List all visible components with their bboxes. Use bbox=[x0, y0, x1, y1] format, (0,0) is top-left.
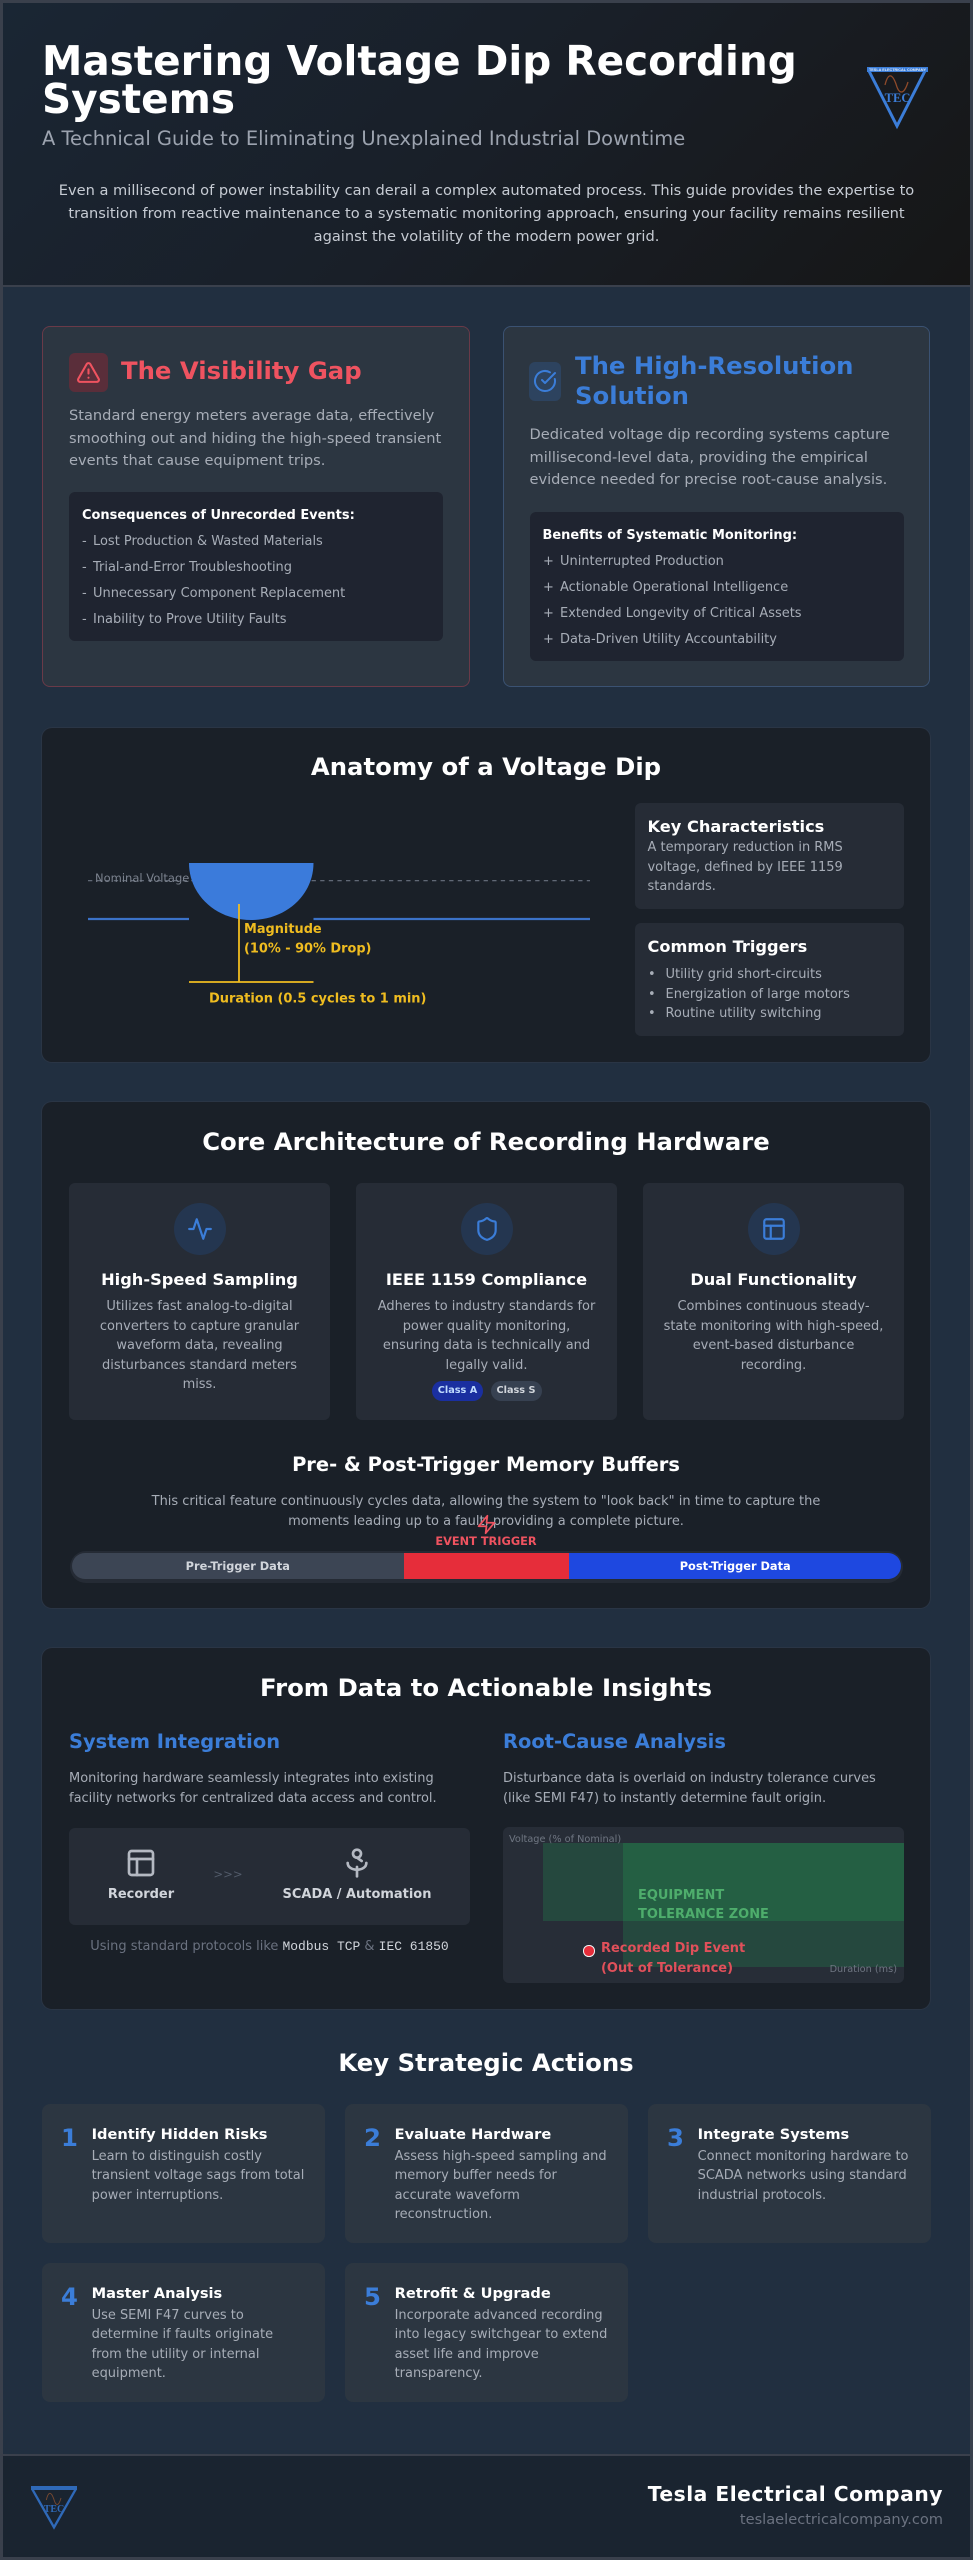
logo: TEC: TESLA ELECTRICAL COMPANY bbox=[869, 68, 926, 72]
description: transient voltage sags from total bbox=[92, 2168, 304, 2183]
heading: The High-Resolution bbox=[575, 351, 854, 380]
number: 4 bbox=[61, 2282, 78, 2311]
chart: voltage dip diagram: Magnitude bbox=[244, 922, 322, 937]
card: common triggers: Utility grid short-circuits bbox=[666, 967, 822, 982]
description: Utilizes fast analog-to-digital bbox=[106, 1299, 293, 1314]
description: Monitoring hardware seamlessly integrates into existing bbox=[69, 1771, 434, 1786]
heading: System Integration bbox=[69, 1730, 280, 1753]
description: waveform data, revealing bbox=[116, 1338, 283, 1353]
panel: data to insights bbox=[42, 1648, 930, 2009]
heading: Evaluate Hardware bbox=[395, 2126, 551, 2142]
card: IEEE 1159 compliance bbox=[356, 1183, 617, 1420]
heading: Master Analysis bbox=[92, 2284, 222, 2302]
zone label: TOLERANCE ZONE bbox=[638, 1907, 769, 1922]
list items: + bbox=[543, 632, 554, 646]
heading: Common Triggers bbox=[648, 937, 807, 956]
bullet list bbox=[648, 967, 850, 1021]
description: from the utility or internal bbox=[92, 2346, 259, 2362]
logo: TEC bbox=[867, 67, 928, 130]
icon: recorder bbox=[128, 1850, 154, 1876]
description: (like SEMI F47) to instantly determine fault origin. bbox=[503, 1790, 826, 1806]
axis label: voltage: Voltage (% of Nominal) bbox=[509, 1834, 621, 1845]
chart: voltage dip diagram: (10% - 90% Drop) bbox=[244, 942, 371, 956]
list items: + bbox=[543, 554, 554, 568]
list heading: Benefits of Systematic Monitoring: bbox=[542, 528, 797, 542]
description bbox=[100, 1299, 300, 1392]
card: common triggers: Energization of large motors bbox=[666, 986, 850, 1002]
description bbox=[503, 1771, 876, 1806]
benefits list: Uninterrupted Production bbox=[560, 554, 724, 568]
icon: warning triangle bbox=[69, 353, 108, 392]
description bbox=[378, 1299, 596, 1372]
segment: pre-trigger bbox=[72, 1553, 404, 1579]
segment: post-trigger bbox=[569, 1553, 901, 1579]
consequences list: Inability to Prove Utility Faults bbox=[93, 612, 287, 626]
action 2 bbox=[345, 2104, 628, 2243]
benefits list: Actionable Operational Intelligence bbox=[560, 580, 788, 594]
description: state monitoring with high-speed, bbox=[664, 1318, 883, 1334]
description: industrial protocols. bbox=[698, 2188, 826, 2202]
description: recording. bbox=[741, 1358, 806, 1372]
badge: class A: Class A bbox=[438, 1385, 477, 1396]
description: memory buffers: This critical feature continuously cycles data, allowing the system to "look back" in time to capture the bbox=[152, 1494, 820, 1509]
arrow chevrons: >>> bbox=[213, 1867, 243, 1881]
description: miss. bbox=[183, 1377, 216, 1392]
description: asset life and improve bbox=[395, 2346, 539, 2362]
chart: voltage dip diagram bbox=[88, 863, 590, 1006]
action 5 bbox=[345, 2263, 628, 2402]
column: system integration bbox=[69, 1730, 470, 1954]
description bbox=[394, 2148, 607, 2222]
card: key characteristics bbox=[635, 803, 904, 909]
marker: dip event bbox=[583, 1945, 594, 1956]
description: transparency. bbox=[395, 2366, 482, 2381]
list items: - bbox=[82, 534, 87, 548]
paragraph bbox=[530, 426, 890, 488]
label: event trigger: EVENT TRIGGER bbox=[435, 1534, 537, 1548]
bullet list: • bbox=[648, 967, 656, 982]
heading: Integrate Systems bbox=[698, 2126, 849, 2142]
heading: Identify Hidden Risks bbox=[92, 2126, 267, 2142]
paragraph: millisecond-level data, providing the empirical bbox=[530, 449, 868, 466]
description: Use SEMI F47 curves to bbox=[92, 2308, 244, 2322]
heading: IEEE 1159 Compliance bbox=[386, 1270, 587, 1289]
footer bbox=[0, 2454, 973, 2560]
benefits list: Data-Driven Utility Accountability bbox=[560, 632, 777, 646]
heading: Solution bbox=[575, 380, 689, 410]
list items: - bbox=[82, 560, 87, 574]
consequences list: Trial-and-Error Troubleshooting bbox=[93, 560, 292, 574]
intro paragraph: Even a millisecond of power instability can derail a complex automated process. This guide provides the expertise to bbox=[59, 182, 914, 198]
icon: shield bbox=[460, 1203, 512, 1255]
description: SCADA networks using standard bbox=[698, 2168, 907, 2183]
chart: voltage dip diagram: Duration (0.5 cycles to 1 min) bbox=[209, 992, 426, 1006]
segment: event bbox=[404, 1553, 569, 1579]
title: Mastering Voltage Dip Recording bbox=[42, 36, 797, 84]
intro paragraph: transition from reactive maintenance to a systematic monitoring approach, ensuring your facility remains resilient bbox=[68, 204, 905, 222]
description: disturbances standard meters bbox=[102, 1358, 297, 1372]
chart: voltage dip diagram: Nominal Voltage bbox=[95, 871, 189, 885]
description: power interruptions. bbox=[92, 2188, 223, 2202]
list items bbox=[82, 534, 345, 626]
description: Connect monitoring hardware to bbox=[698, 2148, 908, 2164]
icon: layout bbox=[748, 1203, 800, 1255]
list items bbox=[543, 554, 802, 646]
description: equipment. bbox=[92, 2366, 166, 2381]
card: common triggers bbox=[635, 923, 904, 1036]
icon: event trigger bolt bbox=[478, 1514, 496, 1534]
description: legally valid. bbox=[446, 1358, 527, 1372]
heading: Key Characteristics bbox=[648, 817, 824, 836]
action 4 bbox=[42, 2263, 325, 2402]
list items: - bbox=[82, 586, 87, 600]
card: high-speed sampling bbox=[69, 1183, 330, 1420]
description: power quality monitoring, bbox=[403, 1318, 570, 1334]
heading: High-Speed Sampling bbox=[101, 1270, 298, 1289]
card: common triggers: Routine utility switching bbox=[666, 1006, 822, 1021]
heading: key strategic actions: Key Strategic Actions bbox=[338, 2048, 634, 2077]
description bbox=[92, 2308, 273, 2381]
list items: - bbox=[82, 612, 87, 626]
description bbox=[664, 1299, 883, 1372]
list items: + bbox=[543, 580, 554, 594]
buffer bar bbox=[70, 1551, 903, 1583]
description bbox=[395, 2308, 607, 2381]
description: Assess high-speed sampling and bbox=[395, 2148, 607, 2164]
description: converters to capture granular bbox=[100, 1318, 299, 1334]
heading: memory buffers: Pre- & Post-Trigger Memory Buffers bbox=[292, 1453, 680, 1476]
panel: the high-resolution solution bbox=[503, 326, 930, 687]
benefits list bbox=[530, 512, 904, 661]
number: 5 bbox=[364, 2282, 381, 2311]
heading: data to insights: From Data to Actionable Insights bbox=[260, 1673, 712, 1702]
label: scada: SCADA / Automation bbox=[283, 1887, 431, 1902]
badge: class S: Class S bbox=[496, 1385, 535, 1396]
company name: Tesla Electrical Company bbox=[648, 2482, 943, 2506]
integration diagram bbox=[69, 1828, 470, 1925]
benefits list: Extended Longevity of Critical Assets bbox=[560, 606, 802, 620]
segment: post-trigger: Post-Trigger Data bbox=[680, 1559, 791, 1573]
title: Systems bbox=[42, 75, 235, 123]
consequences list: Unnecessary Component Replacement bbox=[93, 586, 345, 600]
description: determine if faults originate bbox=[92, 2327, 273, 2342]
tolerance band lower bbox=[623, 1843, 904, 1967]
website: teslaelectricalcompany.com bbox=[740, 2511, 943, 2528]
description bbox=[698, 2148, 908, 2202]
label: dip event: Recorded Dip Event bbox=[601, 1941, 745, 1956]
description: into legacy switchgear to extend bbox=[395, 2327, 607, 2342]
description: memory buffers: moments leading up to a fault, providing a complete picture. bbox=[288, 1514, 684, 1528]
label: dip event bbox=[601, 1941, 745, 1976]
consequences list: Lost Production & Wasted Materials bbox=[93, 534, 323, 548]
description: reconstruction. bbox=[395, 2207, 492, 2222]
description: Incorporate advanced recording bbox=[395, 2308, 603, 2322]
paragraph bbox=[69, 407, 441, 469]
heading: Retrofit & Upgrade bbox=[395, 2284, 551, 2302]
heading: core architecture: Core Architecture of Recording Hardware bbox=[202, 1127, 770, 1156]
zone label bbox=[638, 1888, 769, 1922]
logo: TEC small: TEC bbox=[44, 2504, 64, 2515]
title bbox=[42, 36, 797, 123]
axis label: duration: Duration (ms) bbox=[830, 1964, 897, 1975]
description: standards. bbox=[648, 879, 716, 894]
heading: Dual Functionality bbox=[690, 1270, 857, 1289]
description: memory buffers bbox=[152, 1494, 820, 1528]
description bbox=[92, 2148, 304, 2202]
tolerance band upper bbox=[543, 1843, 904, 1921]
icon: scada bbox=[346, 1848, 368, 1878]
action 1 bbox=[42, 2104, 325, 2243]
description: memory buffer needs for bbox=[395, 2168, 557, 2183]
chart: tolerance curve bbox=[503, 1827, 904, 1983]
header band bbox=[0, 0, 973, 287]
label: recorder: Recorder bbox=[108, 1887, 174, 1902]
protocols note: Using standard protocols like Modbus TCP & IEC 61850 bbox=[90, 1939, 449, 1954]
intro paragraph bbox=[59, 182, 914, 244]
description: ensuring data is technically and bbox=[383, 1338, 590, 1353]
subtitle: A Technical Guide to Eliminating Unexplained Industrial Downtime bbox=[42, 127, 685, 150]
icon: check circle bbox=[529, 362, 561, 401]
description: voltage, defined by IEEE 1159 bbox=[648, 860, 843, 874]
badge: class S bbox=[490, 1381, 542, 1401]
description: A temporary reduction in RMS bbox=[648, 840, 843, 855]
paragraph: smoothing out and hiding the high-speed transient bbox=[69, 430, 441, 447]
action 3 bbox=[648, 2104, 931, 2243]
description: Adheres to industry standards for bbox=[378, 1299, 595, 1314]
panel: the visibility gap bbox=[42, 326, 470, 687]
paragraph: Standard energy meters average data, effectively bbox=[69, 407, 434, 424]
number: 3 bbox=[667, 2123, 684, 2152]
number: 2 bbox=[364, 2123, 381, 2152]
heading bbox=[575, 351, 854, 410]
panel: anatomy of a voltage dip bbox=[42, 728, 930, 1062]
list heading: Consequences of Unrecorded Events: bbox=[82, 508, 355, 522]
label: dip event: (Out of Tolerance) bbox=[601, 1960, 733, 1976]
logo: TEC small bbox=[31, 2486, 77, 2530]
segment: pre-trigger: Pre-Trigger Data bbox=[186, 1559, 290, 1573]
description: facility networks for centralized data access and control. bbox=[69, 1790, 437, 1806]
panel: core architecture bbox=[42, 1102, 930, 1608]
list items: + bbox=[543, 606, 554, 620]
bullet list: • bbox=[648, 986, 656, 1002]
heading: The Visibility Gap bbox=[121, 356, 362, 385]
intro paragraph: against the volatility of the modern power grid. bbox=[314, 228, 659, 244]
bullet list: • bbox=[648, 1006, 656, 1021]
description: Combines continuous steady- bbox=[677, 1299, 870, 1314]
description: Learn to distinguish costly bbox=[92, 2148, 262, 2164]
description: Disturbance data is overlaid on industry tolerance curves bbox=[503, 1771, 876, 1786]
number: 1 bbox=[61, 2123, 78, 2152]
description bbox=[648, 840, 843, 894]
description: event-based disturbance bbox=[693, 1338, 854, 1353]
heading: anatomy: Anatomy of a Voltage Dip bbox=[311, 752, 661, 781]
paragraph: events that cause equipment trips. bbox=[69, 452, 325, 469]
column: root-cause analysis bbox=[503, 1730, 904, 1983]
description: accurate waveform bbox=[395, 2188, 520, 2202]
logo: TEC: TEC bbox=[885, 91, 910, 105]
paragraph: Dedicated voltage dip recording systems capture bbox=[530, 426, 890, 443]
zone label: EQUIPMENT bbox=[638, 1888, 724, 1902]
card: dual functionality bbox=[643, 1183, 904, 1420]
consequences list bbox=[69, 492, 443, 641]
icon: activity bbox=[174, 1203, 226, 1255]
paragraph: evidence needed for precise root-cause analysis. bbox=[530, 471, 887, 488]
badge: class A bbox=[432, 1381, 483, 1401]
description bbox=[69, 1771, 437, 1806]
heading: Root-Cause Analysis bbox=[503, 1730, 726, 1753]
